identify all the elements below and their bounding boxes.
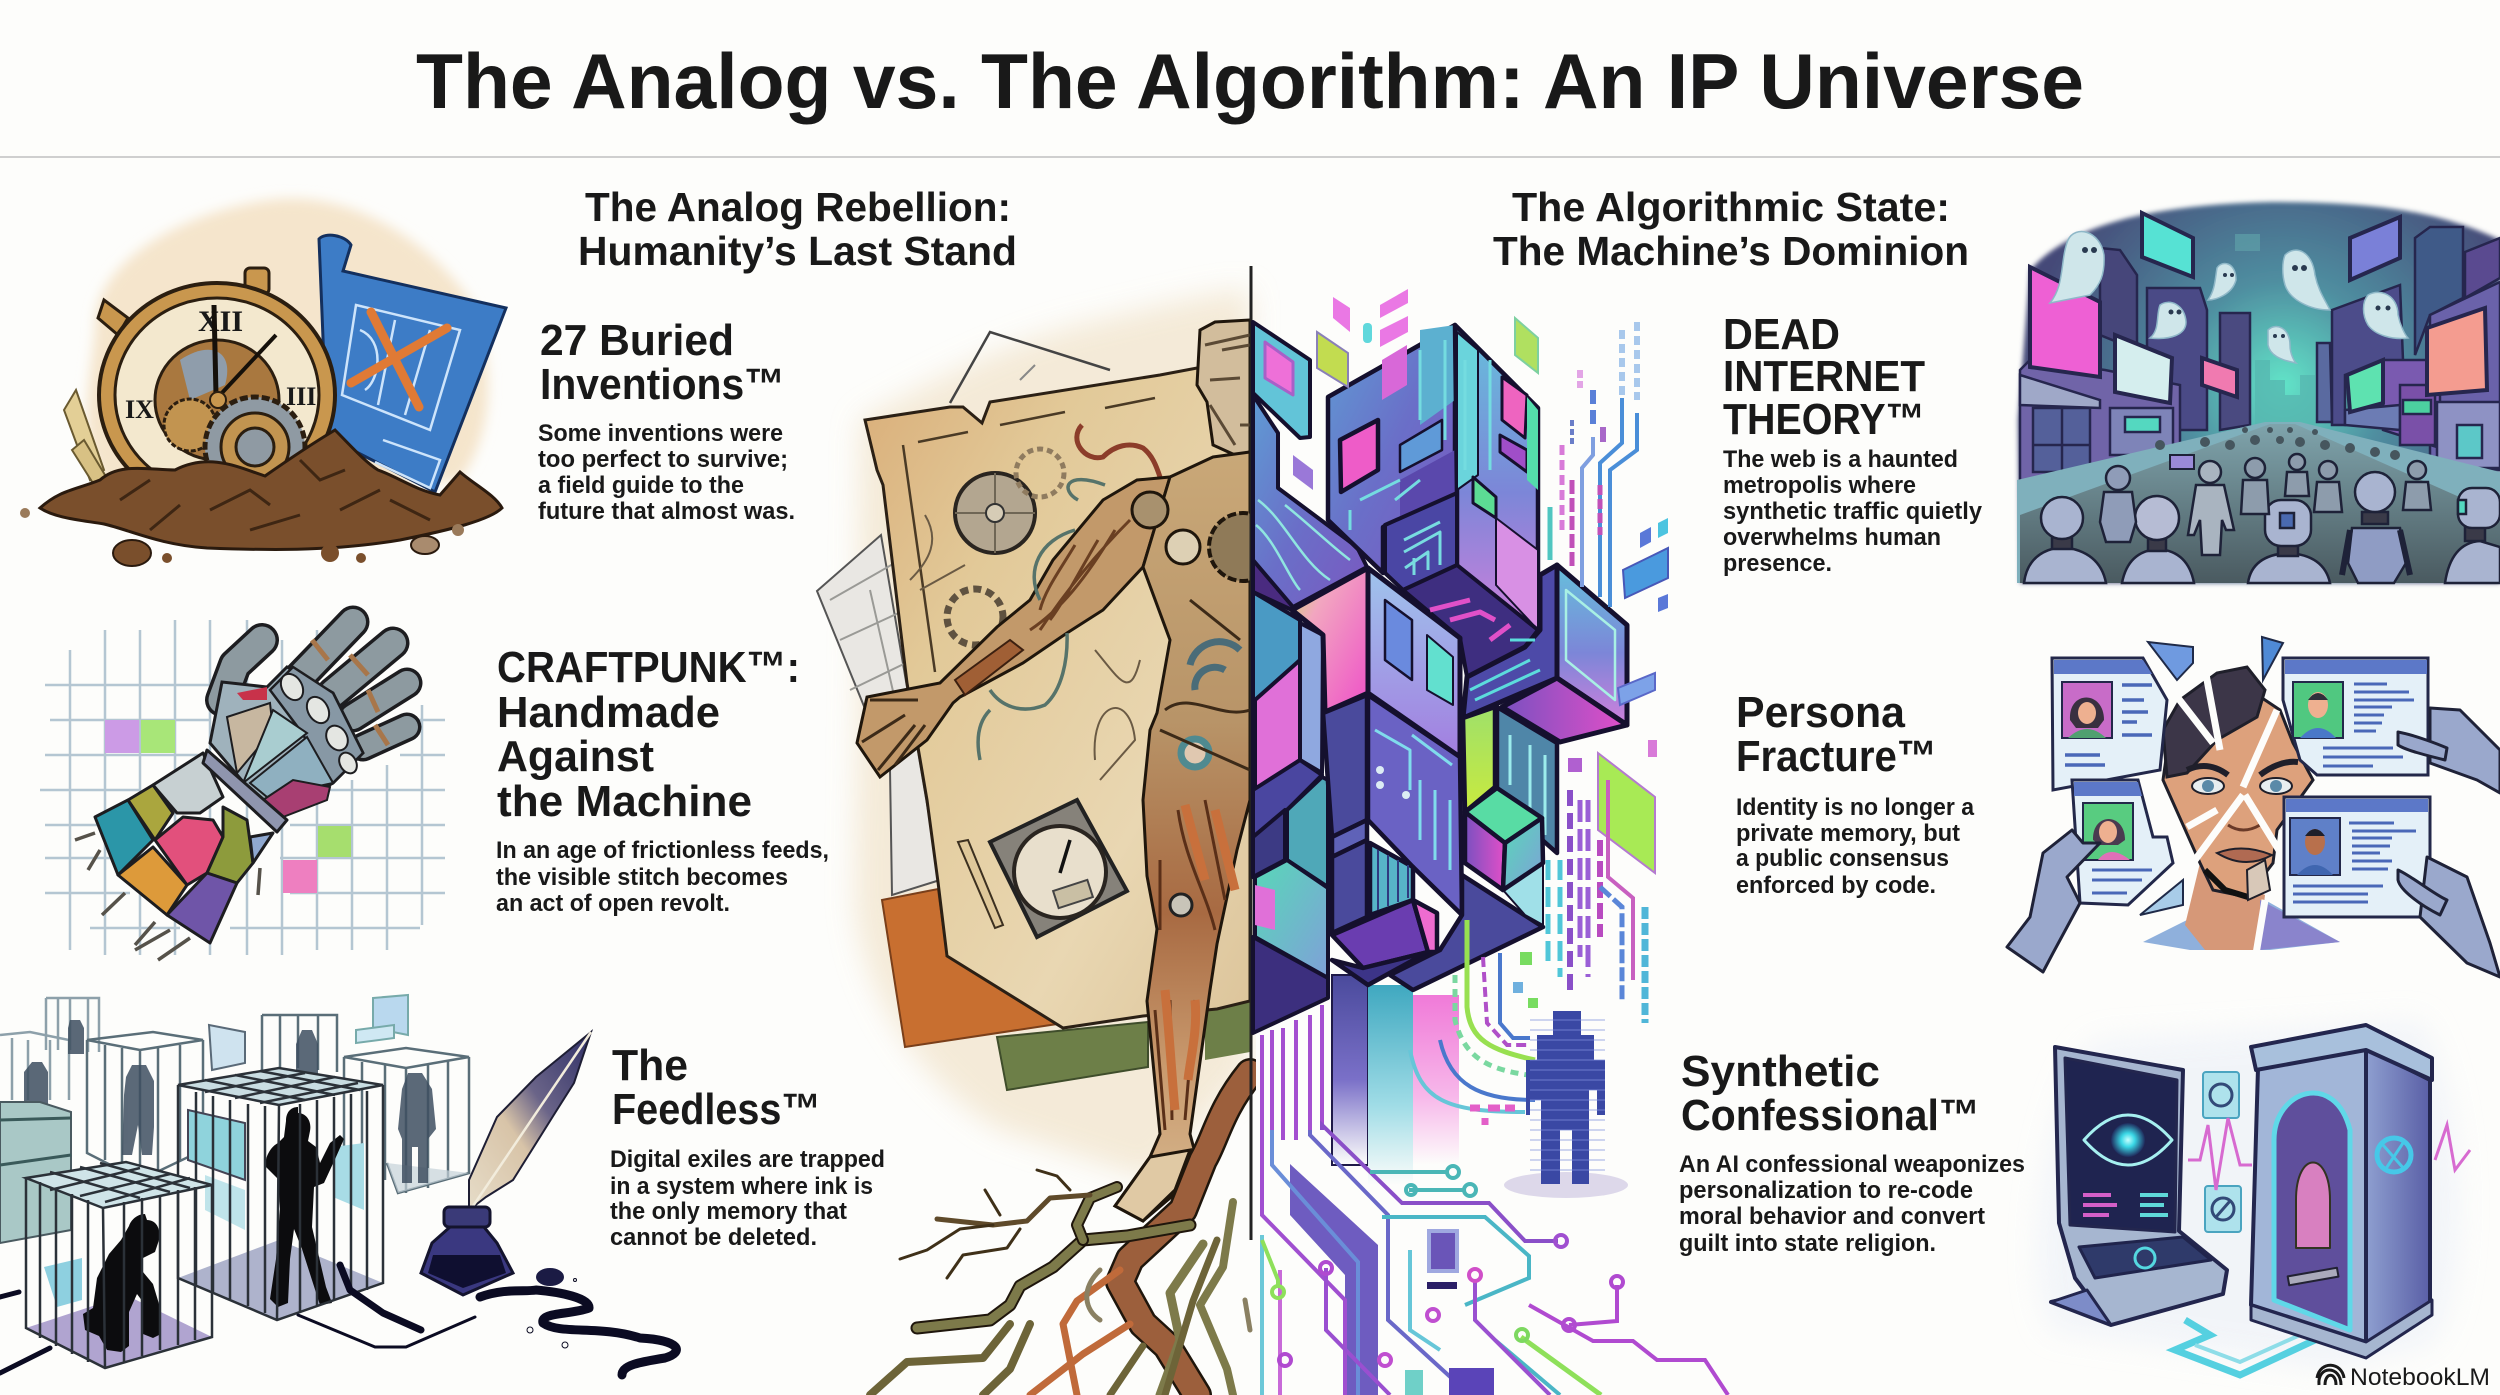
- card: bottom right: [2284, 797, 2430, 917]
- background cages: [0, 998, 469, 1193]
- section heading: The Algorithmic State: The Algorithmic State:: [1512, 184, 1950, 230]
- text block: The Feedless: the only memory that: [610, 1198, 847, 1225]
- text block: Dead Internet Theory: metropolis where: [1723, 472, 1916, 499]
- patchwork cuff: [95, 750, 287, 943]
- text block: 27 Buried Inventions: too perfect to survive;: [538, 446, 788, 473]
- section heading: The Analog Rebellion: The Analog Rebellion:: [585, 184, 1011, 230]
- section heading: The Analog Rebellion: [578, 184, 1017, 274]
- ghosts: [2050, 232, 2408, 363]
- text block: Dead Internet Theory: overwhelms human: [1723, 524, 1941, 551]
- icon: AI confessional kiosk and booth: [2038, 1020, 2470, 1375]
- circuit traces: [1262, 1125, 1728, 1395]
- parchment: [865, 358, 1250, 1028]
- tree roots: [870, 1073, 1250, 1395]
- text block: Craftpunk: the Machine: [497, 777, 752, 826]
- signal pulses: [2188, 1118, 2252, 1190]
- text block: The Feedless: [610, 1041, 885, 1251]
- text block: Synthetic Confessional: guilt into state religion.: [1679, 1230, 1936, 1257]
- text block: Synthetic Confessional: Confessional™: [1681, 1091, 1980, 1140]
- card: top left: [2052, 658, 2167, 790]
- isometric block: central column: [1323, 695, 1557, 990]
- sketch gauge on parchment: [947, 449, 1064, 645]
- text block: 27 Buried Inventions: a field guide to the: [538, 472, 744, 499]
- text block: The Feedless: The: [612, 1041, 688, 1090]
- small icon tiles: [2203, 1072, 2241, 1232]
- pencil sketch: [958, 840, 1003, 928]
- pressure gauge plate: [990, 800, 1127, 937]
- text block: Dead Internet Theory: DEAD: [1723, 310, 1840, 359]
- isometric block: green-pink cube: [1465, 788, 1543, 925]
- white shards: [2147, 658, 2285, 960]
- text block: Persona Fracture: enforced by code.: [1736, 872, 1936, 899]
- background silhouettes: [24, 1020, 436, 1183]
- far skyline: [2255, 360, 2315, 425]
- left shopfront: [2020, 375, 2173, 472]
- text block: Dead Internet Theory: THEORY™: [1723, 395, 1925, 444]
- isometric block: dark recess: [1385, 493, 1538, 677]
- text block: Synthetic Confessional: [1679, 1047, 2025, 1257]
- floor trace: [2175, 1320, 2315, 1375]
- card: bottom left: [2072, 780, 2173, 905]
- front cage with kneeling figure: [26, 1162, 212, 1368]
- isometric block: upper tower: [1328, 325, 1538, 630]
- text block: The Feedless: Feedless™: [612, 1085, 821, 1134]
- text block: 27 Buried Inventions: 27 Buried: [540, 316, 734, 365]
- cyborg torso and leg: [1115, 452, 1250, 1221]
- text block: Persona Fracture: Identity is no longer a: [1736, 794, 1975, 821]
- text block: Persona Fracture: Fracture™: [1736, 732, 1937, 781]
- isometric block: lower-left stack: [1253, 560, 1328, 1033]
- text block: Synthetic Confessional: personalization to re-code: [1679, 1177, 1973, 1204]
- text block: Persona Fracture: [1736, 688, 1975, 899]
- icon: buried pocket watch and blueprint: [20, 198, 506, 566]
- robot hands: [2007, 708, 2500, 977]
- road and sidewalks: [2017, 422, 2500, 583]
- isometric block: far left panel: [1253, 322, 1367, 607]
- kiosk: [2051, 1047, 2227, 1325]
- icon: haunted city with ghosts and robots: [2017, 202, 2500, 583]
- icon: patchwork glove on grid: [40, 620, 445, 960]
- stem columns: [1256, 975, 1459, 1185]
- text block: Craftpunk: In an age of frictionless feeds,: [496, 837, 829, 864]
- buildings: [2020, 227, 2500, 495]
- text block: Persona Fracture: private memory, but: [1736, 820, 1960, 847]
- title: The Analog vs. The Algorithm: An IP Universe: [416, 37, 2084, 125]
- text block: Craftpunk: the visible stitch becomes: [496, 864, 788, 891]
- isometric block: right cube: [1463, 565, 1627, 742]
- isometric block: middle cube: [1292, 568, 1460, 757]
- text block: Craftpunk: Against: [497, 732, 654, 781]
- logo: NotebookLM: NotebookLM: [2350, 1364, 2490, 1391]
- face: [2163, 690, 2313, 897]
- right shopfront: [2400, 385, 2500, 468]
- loose sketch sheets: [817, 332, 1110, 895]
- threads: [75, 833, 260, 960]
- text block: The Feedless: in a system where ink is: [610, 1173, 873, 1200]
- ink stain: [0, 1265, 676, 1375]
- pixel figure: [1504, 1011, 1628, 1198]
- teal server block: [0, 1102, 71, 1243]
- red wire: [1077, 425, 1160, 477]
- text block: 27 Buried Inventions: Some inventions were: [538, 420, 783, 447]
- icon: buried pocket watch and blueprint: IX: [125, 395, 154, 424]
- booth: [2251, 1025, 2432, 1358]
- text block: Persona Fracture: a public consensus: [1736, 845, 1949, 872]
- cyborg arm and hand: [857, 477, 1170, 777]
- central artwork: algorithmic half: [1253, 289, 1728, 1395]
- text block: Craftpunk: an act of open revolt.: [496, 890, 730, 917]
- ink bottle: [421, 1207, 513, 1295]
- palm: [210, 667, 363, 817]
- text block: Craftpunk: CRAFTPUNK™:: [497, 643, 800, 692]
- text block: Dead Internet Theory: presence.: [1723, 550, 1832, 577]
- text block: 27 Buried Inventions: [538, 316, 795, 525]
- cyborg head: [1197, 320, 1250, 455]
- text block: 27 Buried Inventions: future that almost was.: [538, 498, 795, 525]
- shirt and neck: [2143, 863, 2340, 950]
- text block: Synthetic Confessional: An AI confessional weaponizes: [1679, 1151, 2025, 1178]
- floating shards: [1293, 289, 1668, 1008]
- icon: buried pocket watch and blueprint: III: [286, 382, 316, 411]
- glowing billboards: [2030, 213, 2487, 412]
- text block: Dead Internet Theory: The web is a haunted: [1723, 446, 1958, 473]
- text block: The Feedless: Digital exiles are trapped: [610, 1146, 885, 1173]
- icon: fractured identity face with profile cards: [2007, 637, 2500, 977]
- main cage with standing figure: [178, 1068, 383, 1320]
- torso gears: [1132, 492, 1277, 916]
- central artwork: analog half: [817, 290, 1277, 1395]
- card: top right: [2283, 658, 2428, 775]
- green cloth: [997, 1001, 1250, 1090]
- text block: 27 Buried Inventions: Inventions™: [540, 360, 785, 409]
- icon: buried pocket watch and blueprint: XII: [198, 305, 243, 338]
- text block: Synthetic Confessional: moral behavior and convert: [1679, 1203, 1985, 1230]
- quill: [469, 1032, 591, 1212]
- section heading: The Algorithmic State: The Machine’s Dominion: [1493, 228, 1969, 274]
- text block: Synthetic Confessional: Synthetic: [1681, 1047, 1880, 1096]
- robot crowd: [2024, 454, 2500, 583]
- icon: caged exiles with quill and ink: [0, 995, 676, 1375]
- central divider: [1250, 266, 1252, 1240]
- section heading: The Analog Rebellion: Humanity’s Last Stand: [578, 228, 1017, 274]
- text block: Craftpunk: [496, 643, 829, 917]
- section heading: The Algorithmic State: [1493, 184, 1969, 274]
- text block: Craftpunk: Handmade: [497, 688, 720, 737]
- vertical data lines: [1410, 322, 1645, 1125]
- text block: Dead Internet Theory: INTERNET: [1723, 352, 1925, 401]
- text block: The Feedless: cannot be deleted.: [610, 1224, 817, 1251]
- text block: Persona Fracture: Persona: [1736, 688, 1906, 737]
- screens: [209, 1025, 245, 1070]
- orange cloth: [882, 889, 1057, 1047]
- text block: Dead Internet Theory: [1723, 310, 1983, 577]
- fingers: [222, 622, 407, 747]
- text block: Dead Internet Theory: synthetic traffic quietly: [1723, 498, 1983, 525]
